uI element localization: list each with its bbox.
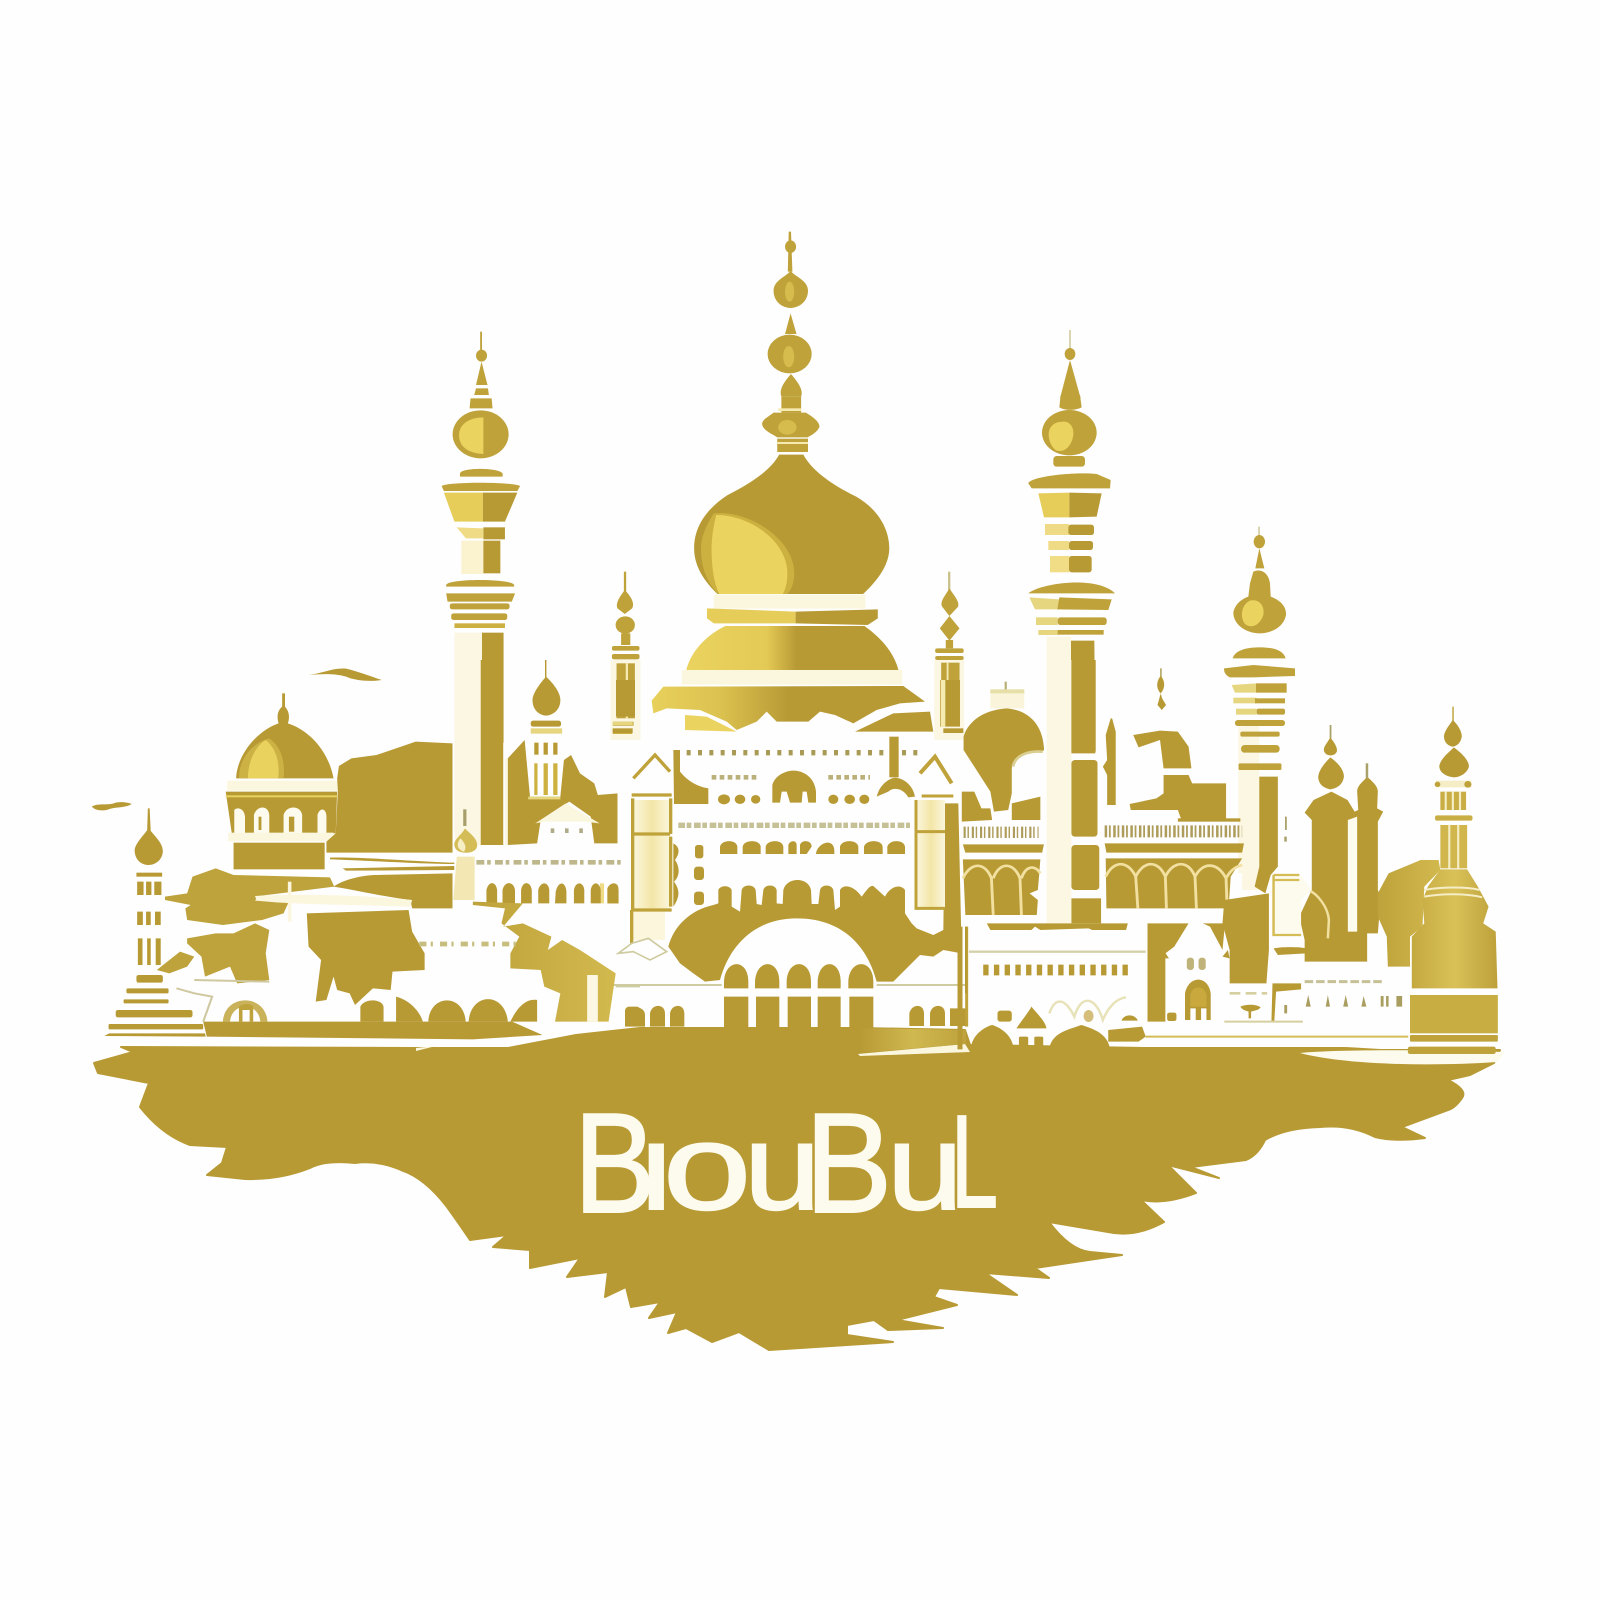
ground arcade (724, 964, 873, 988)
minaret (455, 660, 481, 845)
twin towers (1330, 725, 1331, 738)
hill behind (508, 740, 617, 845)
left district (92, 660, 641, 1039)
wordmark: B (574, 1084, 655, 1243)
drum (707, 608, 796, 623)
wordmark: B (805, 1084, 892, 1243)
small spire right of dome (934, 572, 964, 740)
small spire left of dome (611, 572, 640, 740)
dots (687, 745, 920, 761)
wordmark: u (744, 1099, 821, 1235)
right district (960, 668, 1498, 1054)
arch row (486, 883, 619, 903)
right minaret lower rings and shaft (1047, 660, 1285, 923)
small left minaret (147, 808, 151, 832)
lower dome (686, 626, 898, 670)
bridge arch mass (668, 803, 962, 982)
right main minaret (1028, 330, 1115, 923)
side windows (625, 1006, 967, 1027)
right tower (1452, 707, 1454, 722)
mid mass (1222, 893, 1269, 983)
birds (92, 668, 382, 810)
palace facade and lower dome roof (600, 680, 967, 1028)
grey shrub (176, 980, 269, 1022)
hill (326, 742, 452, 853)
right mass (473, 902, 616, 1022)
small turret (889, 737, 899, 777)
small window slots (695, 845, 703, 858)
central dome with finial (682, 232, 902, 685)
slats (330, 858, 454, 908)
picket rows (964, 815, 1039, 849)
dome (236, 693, 334, 778)
wordmark: L (951, 1088, 998, 1235)
base domes (971, 1007, 1110, 1049)
roof (652, 686, 925, 730)
left main minaret (442, 332, 520, 833)
white building windows (969, 948, 1146, 955)
right secondary minaret (1224, 527, 1295, 873)
left tower (633, 800, 671, 910)
finial (762, 232, 819, 452)
cloud behind right tower (1378, 860, 1440, 967)
middle arch row (720, 841, 905, 854)
small arches (223, 1000, 267, 1022)
tree masses (165, 868, 334, 925)
upper arch windows (772, 771, 816, 803)
wordmark: u (887, 1099, 963, 1235)
onion dome (694, 455, 889, 594)
ground strip (203, 1022, 542, 1039)
dome behind (990, 689, 1024, 708)
right tower (917, 800, 945, 908)
small front minaret (453, 857, 475, 900)
wordmark: o (663, 1099, 751, 1235)
wordmark: ı (636, 1099, 677, 1235)
small right building details (1271, 983, 1301, 1022)
small minaret (545, 660, 546, 680)
side columns (616, 680, 635, 717)
ground island (94, 1028, 1505, 1350)
spire pieces (1103, 718, 1116, 805)
gothic arcades (963, 858, 1242, 915)
